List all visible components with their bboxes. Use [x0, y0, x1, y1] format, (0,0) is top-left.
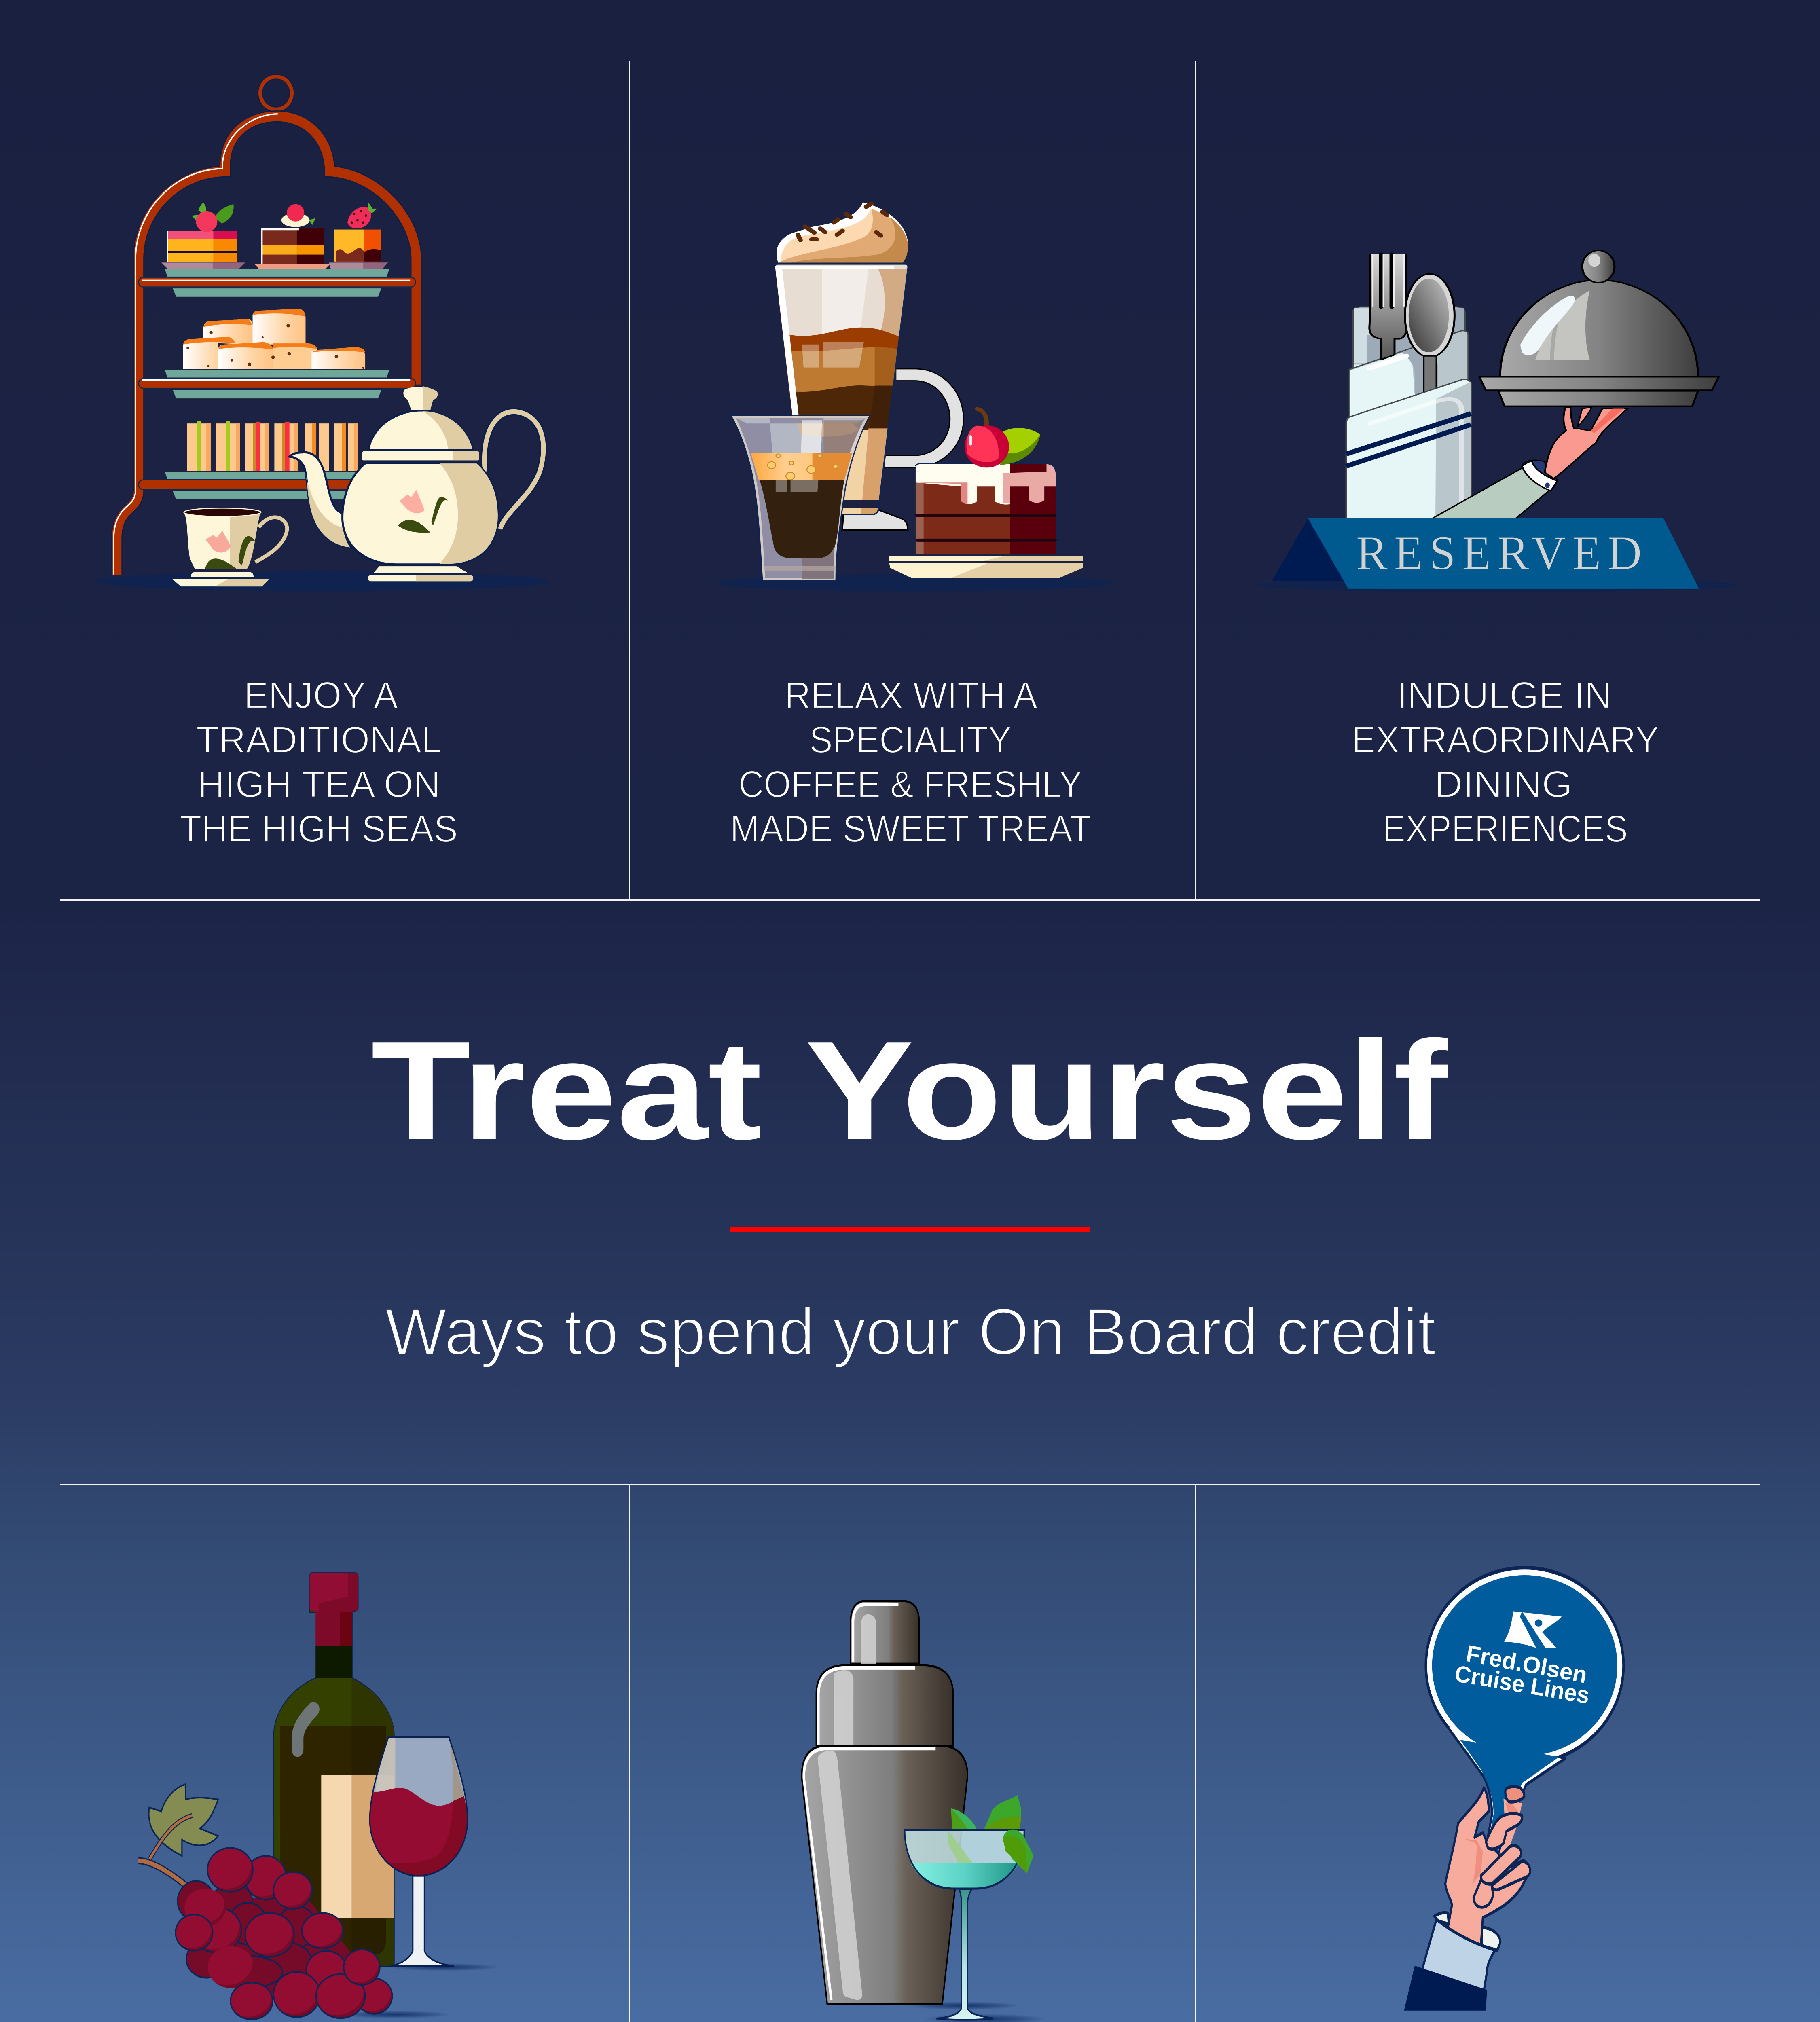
caption: extraordinary dining: INDULGE IN	[1397, 674, 1612, 716]
divider: red rule	[730, 1227, 1090, 1232]
bottom tier sandwiches	[187, 421, 358, 471]
icon: cocktail shaker and martini	[802, 1601, 1047, 2022]
icon: afternoon tea stand and teapot	[94, 77, 550, 591]
middle tier scones	[183, 309, 365, 369]
caption: speciality coffee: RELAX WITH A	[785, 674, 1037, 716]
napkin and cutlery	[1346, 254, 1471, 519]
martini glass	[905, 1830, 1034, 2020]
icon: layered coffee, espresso glass and cake	[717, 202, 1113, 591]
caption: extraordinary dining: DINING	[1434, 763, 1572, 805]
shaker body	[802, 1601, 967, 2004]
slice of chocolate cake with cherry	[889, 409, 1083, 578]
teacup and saucer	[172, 508, 287, 586]
coffee handle and foot	[842, 375, 957, 530]
heading: Treat Yourself: Treat Yourself	[371, 1012, 1450, 1169]
caption: extraordinary dining: EXPERIENCES	[1382, 808, 1628, 850]
paddle logo text: Cruise Lines	[1453, 1660, 1591, 1709]
grape bunch	[138, 1784, 392, 2019]
mint leaves	[951, 1795, 1022, 1829]
caption: speciality coffee: SPECIALITY	[809, 719, 1012, 761]
wine glass	[370, 1737, 468, 1966]
caption: speciality coffee: MADE SWEET TREAT	[730, 808, 1092, 850]
teapot	[290, 386, 544, 581]
caption: extraordinary dining	[1352, 674, 1659, 850]
reserved table sign: RESERVED	[1356, 526, 1648, 580]
wine bottle	[273, 1573, 394, 1966]
paddle logo text	[1453, 1640, 1591, 1709]
caption: high tea: ENJOY A	[244, 674, 398, 716]
caption: high tea: HIGH TEA ON	[197, 763, 440, 805]
paddle logo text: Fred.Olsen	[1464, 1640, 1589, 1688]
caption: high tea	[180, 674, 458, 850]
latte glass	[772, 263, 912, 518]
paddle	[1424, 1566, 1625, 1907]
shirt cuff and sleeve	[1404, 1913, 1500, 2011]
icon: wine bottle, glass and grapes	[138, 1573, 501, 2019]
reserved table sign	[1272, 518, 1699, 589]
icon: reserved sign, napkin cutlery and serving cloche	[1257, 250, 1740, 592]
hand gripping paddle	[1445, 1787, 1530, 1947]
caption: high tea: TRADITIONAL	[196, 719, 442, 761]
icon: hand holding Fred. Olsen paddle	[1404, 1566, 1625, 2011]
whipped cream topping	[777, 202, 908, 263]
silver cloche	[1479, 250, 1719, 406]
caption: speciality coffee	[730, 674, 1092, 850]
serving arm	[1431, 407, 1627, 519]
espresso shot glass	[731, 415, 870, 581]
caption: high tea: THE HIGH SEAS	[180, 808, 458, 850]
subheading: Ways to spend your On Board credit	[385, 1294, 1436, 1368]
shaker highlights	[804, 1604, 935, 2000]
top tier cakes	[161, 203, 388, 269]
caption: extraordinary dining: EXTRAORDINARY	[1352, 719, 1659, 761]
caption: speciality coffee: COFFEE & FRESHLY	[739, 763, 1082, 805]
plates and shelves	[139, 269, 415, 499]
tiered cake stand frame	[114, 77, 416, 575]
